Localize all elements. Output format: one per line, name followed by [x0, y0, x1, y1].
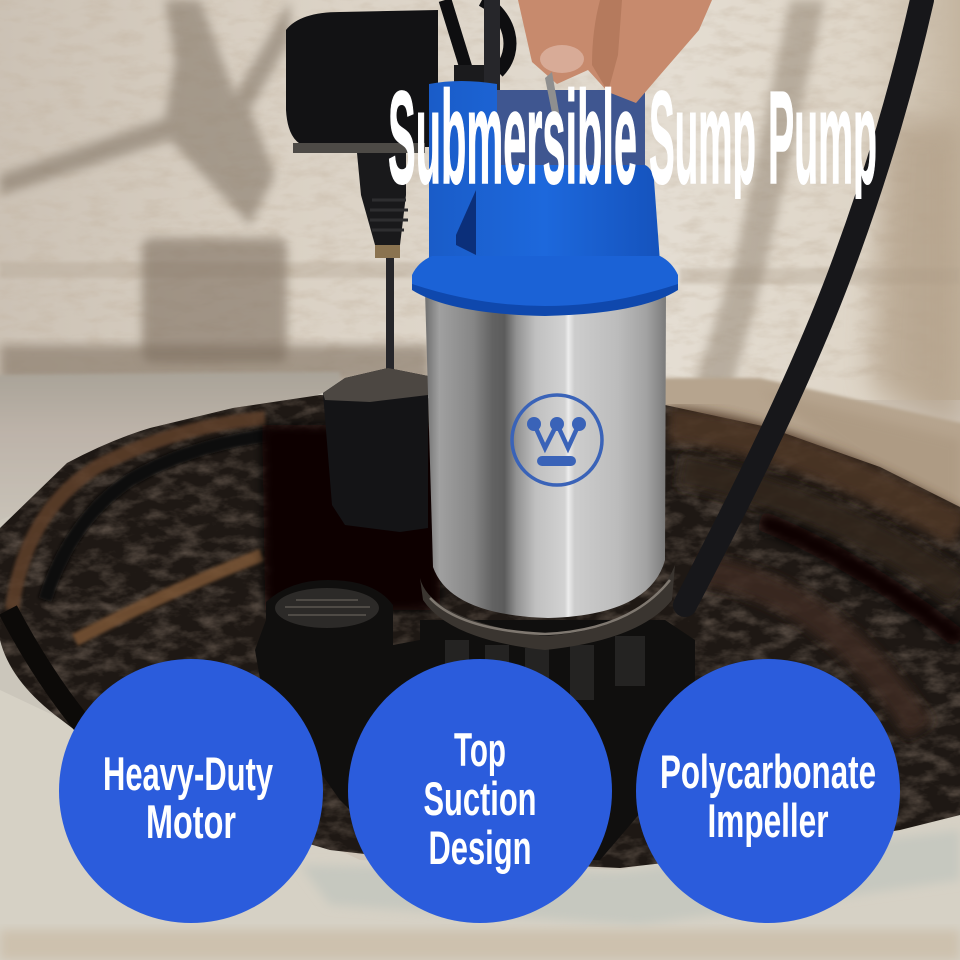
callout: Top Suction Design: Top: [454, 723, 506, 776]
photo: blue pump cap: [412, 0, 678, 316]
photo: stainless steel pump body: [425, 290, 666, 618]
photo: basement wall: [0, 0, 960, 430]
callout: Top Suction Design: Suction: [424, 772, 536, 825]
photo: hand holding the pump: [518, 0, 712, 118]
callout: Polycarbonate Impeller: [636, 659, 900, 923]
callout: Heavy-Duty Motor: Heavy-Duty: [103, 747, 273, 800]
callout: Heavy-Duty Motor: [59, 659, 323, 923]
photo: thumbnail: [540, 45, 584, 73]
callout: Heavy-Duty Motor: Motor: [146, 795, 236, 848]
callout: Top Suction Design: Design: [428, 821, 532, 874]
title: [388, 86, 876, 199]
photo: vertical float switch: [286, 0, 510, 532]
photo: sump pit: [0, 395, 960, 868]
photo: cast iron pump base: [255, 565, 695, 860]
photo: black discharge hose: [685, 0, 922, 605]
photo: concrete floor: [0, 372, 960, 960]
callout: Polycarbonate Impeller: Impeller: [708, 794, 828, 847]
callout: Top Suction Design: [348, 659, 612, 923]
icon: Westinghouse logo: [512, 395, 602, 485]
